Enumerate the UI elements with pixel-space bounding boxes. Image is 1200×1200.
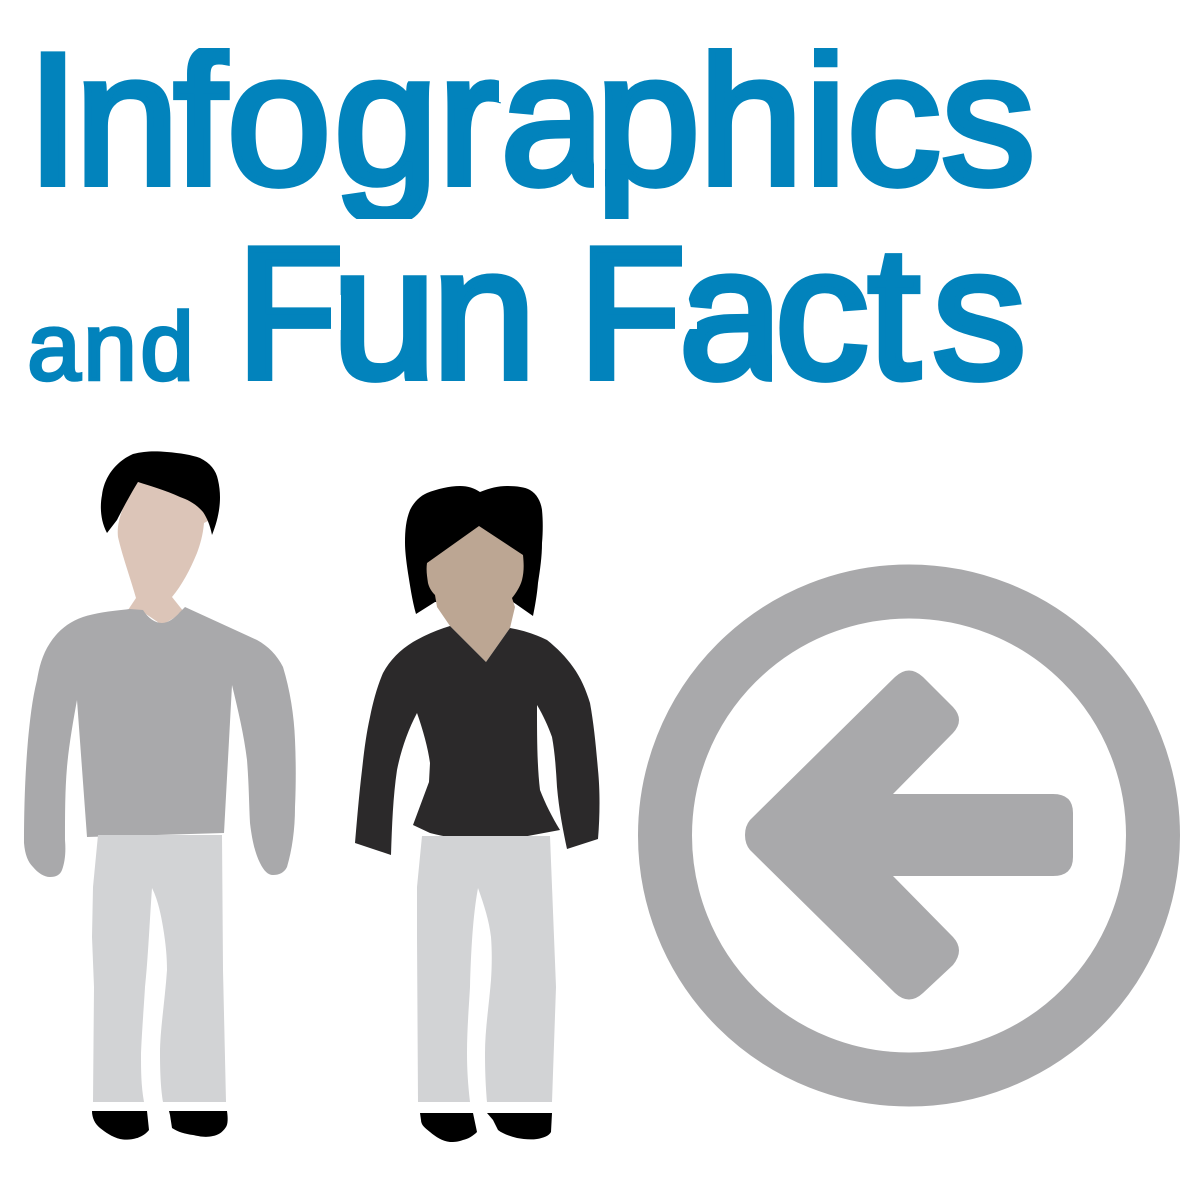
subtitle: and: and [27,293,194,400]
woman top [355,626,600,855]
title: Fun Facts: Fun Facts [236,208,1026,418]
woman right shoe [487,1113,552,1139]
woman trousers [417,836,556,1102]
man hair [101,451,220,535]
man right shoe [169,1111,228,1137]
figure: woman [355,486,600,1142]
man trousers [92,835,226,1102]
icon: left arrow in circle [665,592,1153,1080]
woman hair [405,486,543,616]
man face and neck [118,482,210,625]
left arrow [745,670,1073,1000]
woman left shoe [420,1113,477,1142]
man left shoe [92,1111,149,1140]
circle ring [665,592,1153,1080]
woman face and neck [427,526,524,662]
figure: man [24,451,296,1140]
title: Infographics: Infographics [27,14,1035,224]
man sweater [24,607,296,877]
